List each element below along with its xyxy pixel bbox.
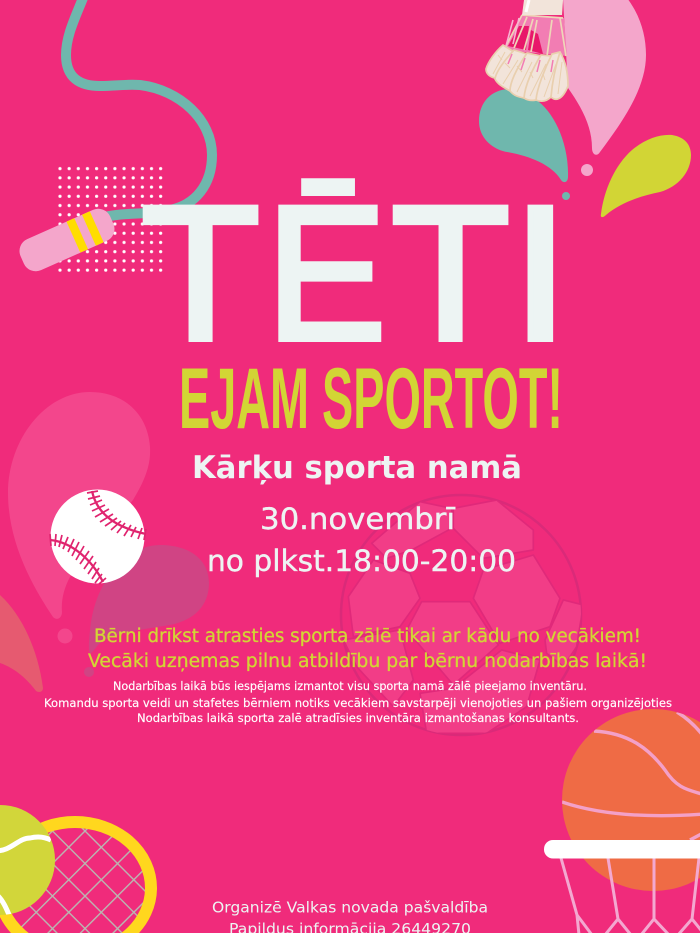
- cork: [522, 0, 563, 15]
- notice in yellow: [88, 626, 647, 672]
- skipping rope: [15, 0, 212, 275]
- pink dot: [581, 164, 593, 176]
- basketball rim: [544, 840, 700, 858]
- racket frame: [0, 822, 151, 933]
- main title: T: [391, 166, 510, 380]
- orange drop shape: [0, 595, 43, 692]
- feathers: [486, 45, 568, 101]
- skirt: [503, 14, 567, 56]
- basketball net: [561, 858, 700, 933]
- notice in yellow: Bērni drīkst atrasties sporta zālē tikai ar kādu no vecākiem!: [94, 626, 641, 647]
- racket strings: [1, 824, 149, 933]
- shuttlecock: [486, 0, 568, 101]
- seams: [50, 491, 146, 582]
- baseball: [50, 490, 146, 584]
- details: Nodarbības laikā sporta zalē atradīsies inventāra izmantošanas konsultants.: [137, 711, 579, 725]
- tennis ball: [0, 805, 55, 917]
- details: Nodarbības laikā būs iespējams izmantot visu sporta namā zālē pieejamo inventāru.: [113, 679, 587, 693]
- dot grid: [56, 164, 166, 275]
- details: [44, 679, 672, 725]
- rope cord: [66, 0, 212, 217]
- basketball seams: [562, 712, 700, 840]
- time: no plkst.18:00-20:00: [207, 544, 516, 578]
- pale drop shape: [8, 392, 150, 619]
- dark drop shape: [89, 545, 209, 654]
- teal dot: [562, 192, 570, 200]
- faded football: [341, 495, 583, 735]
- yellow splash: [601, 135, 691, 217]
- footer: [212, 898, 488, 933]
- main title: Ē: [266, 167, 386, 380]
- tennis racket: [0, 822, 151, 933]
- venue: Kārķu sporta namā: [192, 450, 522, 486]
- footer: Organizē Valkas novada pašvaldība: [212, 898, 488, 916]
- basketball: [562, 709, 700, 891]
- details: Komandu sporta veidi un stafetes bērniem notiks vecākiem savstarpēji vienojoties un pašiem organizējoties: [44, 696, 672, 710]
- dark dot: [84, 667, 94, 677]
- teal splash: [479, 89, 568, 182]
- date: 30.novembrī: [260, 502, 456, 536]
- notice in yellow: Vecāki uzņemas pilnu atbildību par bērnu nodarbības laikā!: [88, 651, 647, 672]
- pale dot: [58, 628, 72, 644]
- main title: [141, 166, 569, 380]
- main title: I: [512, 167, 569, 380]
- main title: T: [141, 166, 260, 380]
- pink splash: [563, 0, 646, 155]
- rope handle: [15, 205, 119, 275]
